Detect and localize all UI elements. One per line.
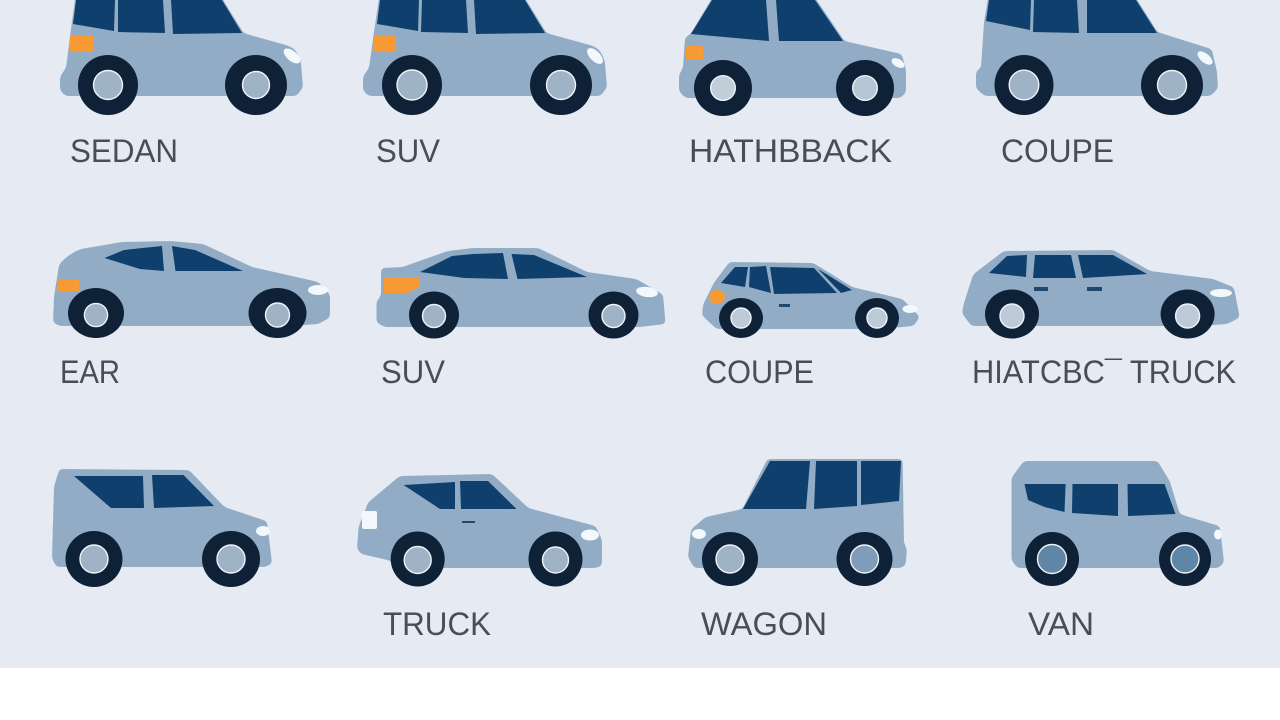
wheels: [1025, 532, 1211, 586]
car: van: [1012, 462, 1223, 642]
body: [689, 460, 906, 567]
headlight: [890, 56, 906, 70]
body: [53, 470, 271, 566]
door handle: [462, 521, 475, 523]
windows: [743, 461, 901, 509]
headlight: [1195, 49, 1215, 67]
car: hiatcbc truck: [963, 251, 1239, 390]
car: ear: [54, 242, 329, 390]
car: sedan: [61, 0, 303, 169]
body: [61, 0, 302, 95]
label: HIATCBC¯ TRUCK: [972, 354, 1236, 390]
headlight: [902, 305, 918, 313]
wheels: [391, 532, 582, 586]
body: [963, 251, 1239, 325]
windows: [74, 475, 214, 508]
car: coupe top row: [977, 0, 1217, 169]
car: wagon: [689, 460, 906, 642]
windows: [691, 0, 843, 41]
tail light: [709, 290, 725, 304]
windows: [989, 255, 1147, 278]
wheels: [694, 60, 894, 116]
body: [977, 0, 1217, 95]
wheels: [994, 55, 1203, 115]
windows: [73, 0, 242, 34]
windows: [377, 0, 545, 34]
body: [378, 249, 664, 326]
headlight: [1214, 530, 1222, 540]
label: COUPE: [705, 354, 814, 390]
windows: [1024, 484, 1176, 516]
door handles: [1034, 287, 1102, 291]
body: [364, 0, 606, 95]
label: EAR: [60, 354, 120, 390]
headlight: [692, 529, 706, 539]
tail light: [57, 279, 79, 291]
tail light: [384, 277, 420, 293]
wheels: [409, 292, 638, 338]
car: truck: [358, 475, 601, 642]
headlight: [308, 285, 328, 295]
body: [1012, 462, 1223, 567]
wheels: [985, 290, 1215, 338]
body: [358, 475, 601, 567]
car: hatchback: [680, 0, 906, 169]
label: VAN: [1028, 606, 1094, 642]
headlight: [635, 286, 659, 298]
windows: [420, 253, 587, 279]
wheels: [66, 531, 260, 587]
wheels: [68, 288, 306, 338]
label: SUV: [381, 354, 446, 390]
door handle: [779, 304, 790, 307]
windows: [986, 0, 1157, 33]
body: [703, 263, 919, 328]
tail light: [70, 35, 93, 52]
label: SUV: [376, 133, 441, 169]
headlight: [581, 530, 599, 540]
tail light: [686, 46, 703, 60]
label: TRUCK: [383, 606, 491, 642]
windows: [404, 481, 516, 509]
label: COUPE: [1001, 133, 1114, 169]
windows: [104, 246, 243, 271]
car: coupe middle row: [703, 263, 919, 390]
headlight: [256, 526, 270, 536]
car: unlabelled compact: [53, 470, 271, 587]
label: SEDAN: [70, 133, 178, 169]
wheels: [382, 55, 592, 115]
label: HATHBBACK: [689, 133, 892, 169]
headlight: [584, 45, 606, 67]
wheels: [78, 55, 287, 115]
label: WAGON: [701, 606, 827, 642]
body: [54, 242, 329, 325]
headlight: [1210, 289, 1232, 297]
car: suv middle row: [378, 249, 664, 390]
body: [680, 0, 905, 97]
wheels: [719, 298, 899, 338]
tail light: [373, 36, 396, 52]
tail light: [362, 511, 377, 529]
windows: [721, 266, 852, 294]
headlight: [281, 46, 303, 66]
wheels: [702, 532, 892, 586]
car: suv top row: [364, 0, 606, 169]
